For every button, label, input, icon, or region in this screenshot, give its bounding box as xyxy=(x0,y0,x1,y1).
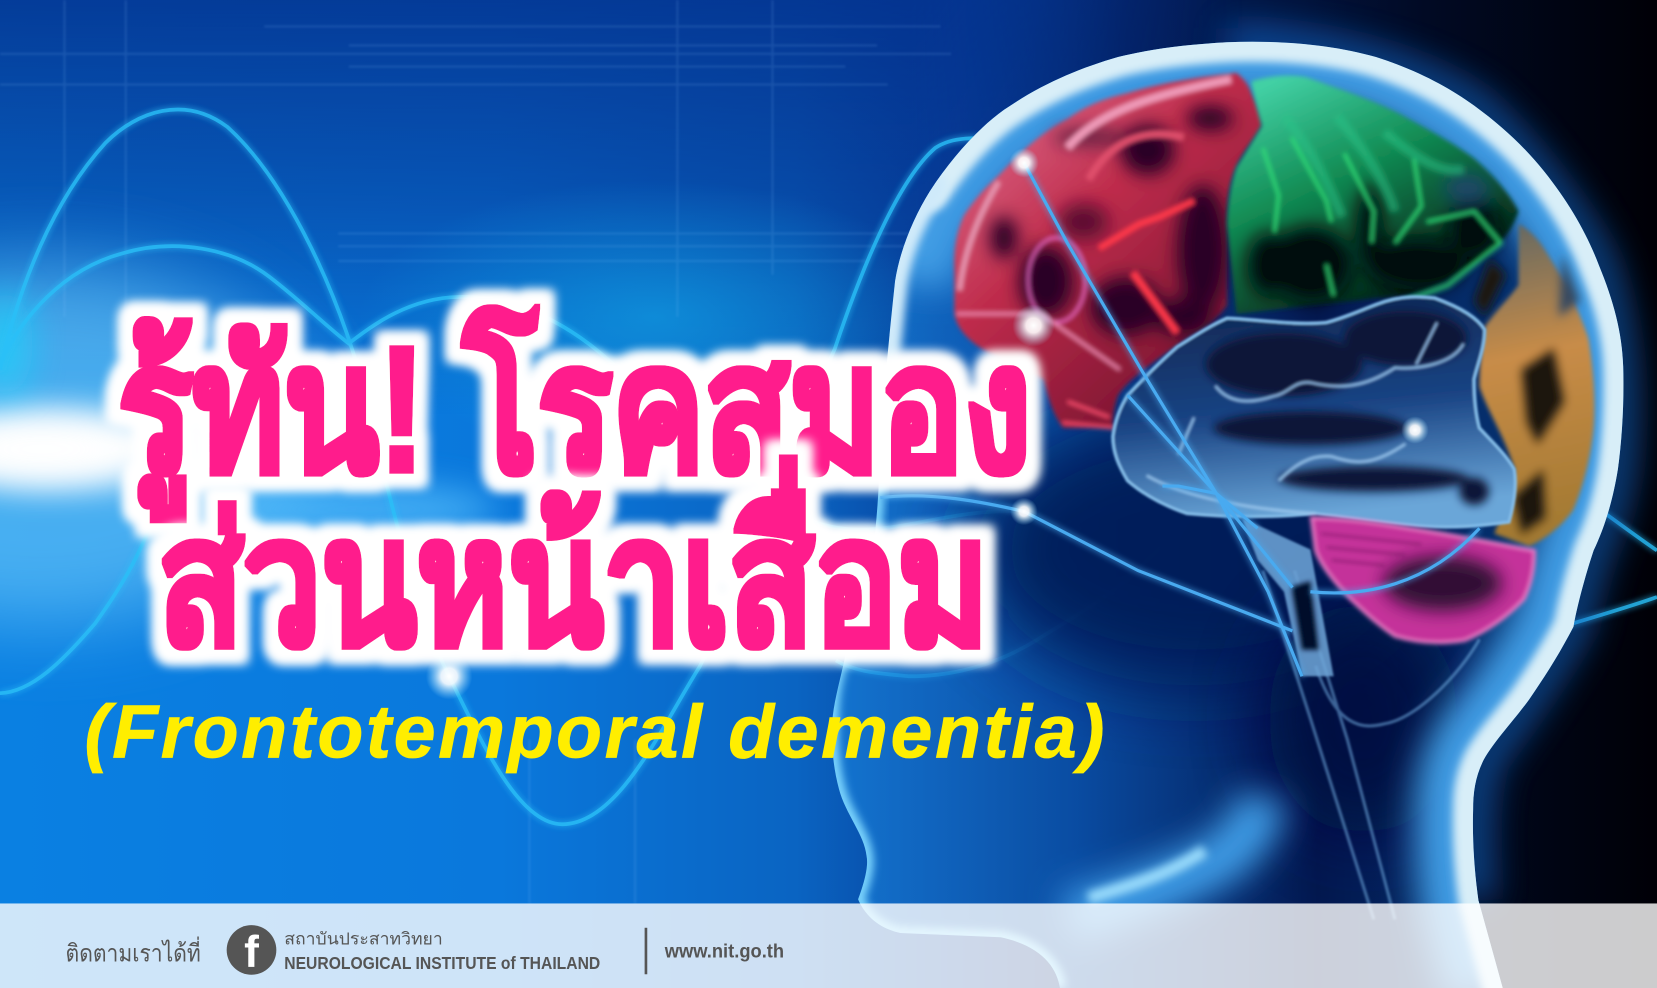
organisation name thai: สถาบันประสาทวิทยา xyxy=(284,930,443,949)
organisation name english: NEUROLOGICAL INSTITUTE of THAILAND xyxy=(284,953,600,973)
jaw highlight xyxy=(1067,798,1263,919)
cerebellum: magenta xyxy=(1311,518,1534,643)
head silhouette xyxy=(832,42,1623,988)
parietal lobe: green xyxy=(1227,76,1519,314)
neck tubes xyxy=(1263,571,1479,919)
brain xyxy=(954,73,1594,676)
footer bar xyxy=(0,903,1657,988)
follow us label: ติดตามเราได้ที่ xyxy=(66,937,201,968)
dark interior xyxy=(972,412,1416,687)
glowing nodes xyxy=(426,148,1429,700)
title line 2: ส่วนหน้าเสื่อม xyxy=(159,457,989,684)
frontal lobe: red xyxy=(954,73,1262,428)
subtitle: (Frontotemporal dementia) xyxy=(85,690,1104,774)
occipital lobe: orange xyxy=(1474,224,1594,546)
outer glow xyxy=(1227,42,1621,900)
icon: facebook xyxy=(227,925,276,977)
sine wave lines behind the head xyxy=(0,110,1657,824)
neural light lines and nodes xyxy=(426,148,1479,700)
icon: facebook: f xyxy=(244,928,259,977)
website: www.nit.go.th xyxy=(664,941,784,962)
title line 1: รู้ทัน! โรคสมอง xyxy=(118,305,1031,521)
brain stem xyxy=(1242,518,1334,676)
temporal lobe: blue xyxy=(1113,297,1515,527)
